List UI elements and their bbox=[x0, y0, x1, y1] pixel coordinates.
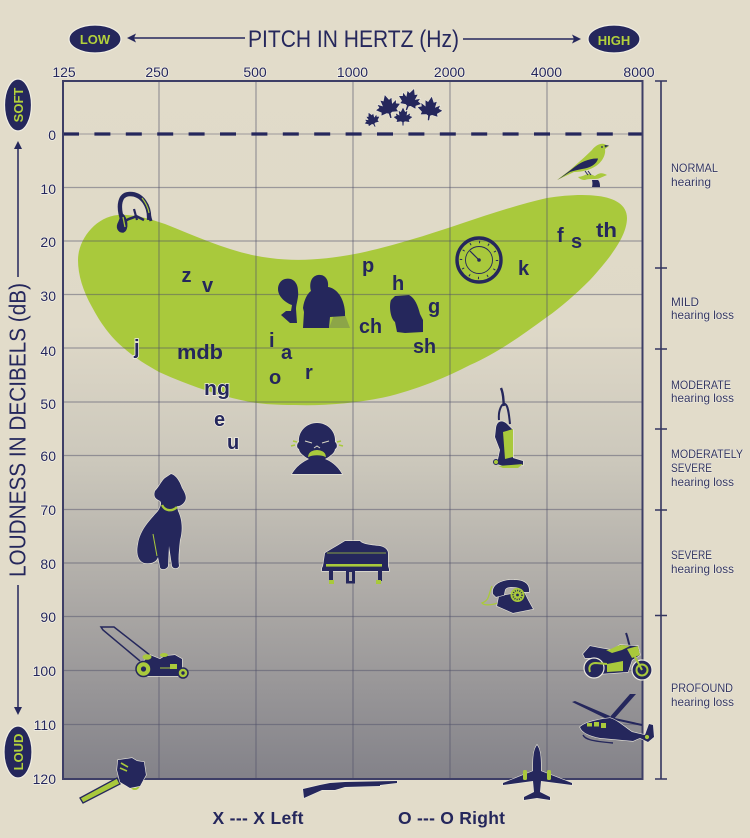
label: moderate hearing loss: hearing loss bbox=[671, 391, 734, 405]
speech sounds: u bbox=[227, 432, 239, 454]
decibel axis labels: 20 bbox=[40, 234, 56, 250]
icon: vacuum cleaner bbox=[494, 388, 523, 468]
speech sounds: o bbox=[269, 367, 281, 389]
badge: soft bbox=[4, 79, 32, 131]
speech sounds: ng bbox=[204, 378, 230, 400]
hearing level scale bbox=[655, 81, 667, 779]
icon: rifle bbox=[303, 781, 397, 798]
frequency axis labels: 4000 bbox=[531, 64, 562, 80]
decibel axis labels: 100 bbox=[33, 663, 56, 679]
decibel axis labels: 80 bbox=[40, 556, 56, 572]
frequency axis labels bbox=[52, 64, 655, 80]
speech sounds: e bbox=[214, 409, 225, 431]
label: severe hearing loss bbox=[671, 550, 734, 576]
speech sounds: k bbox=[518, 258, 530, 280]
speech sounds: r bbox=[305, 362, 313, 384]
badge: soft: SOFT bbox=[11, 88, 26, 122]
label: mild hearing loss: hearing loss bbox=[671, 308, 734, 322]
speech sounds: v bbox=[202, 275, 214, 297]
speech sounds: i bbox=[269, 330, 275, 352]
label: mild hearing loss: MILD bbox=[671, 297, 699, 309]
label: profound hearing loss: PROFOUND bbox=[671, 683, 733, 695]
label: moderate hearing loss: MODERATE bbox=[671, 380, 731, 392]
legend: right ear: O --- O Right bbox=[398, 808, 505, 828]
decibel axis labels: 40 bbox=[40, 343, 56, 359]
badge: low bbox=[69, 25, 121, 53]
label: profound hearing loss: hearing loss bbox=[671, 695, 734, 709]
title: loudness in decibels: LOUDNESS IN DECIBELS (dB) bbox=[4, 283, 30, 577]
speech sounds: p bbox=[362, 255, 374, 277]
label: normal hearing: hearing bbox=[671, 175, 711, 189]
label: normal hearing: NORMAL bbox=[671, 163, 719, 175]
legend: left ear: X --- X Left bbox=[212, 808, 304, 828]
speech sounds: j bbox=[133, 337, 140, 359]
icon: two people talking bbox=[278, 275, 350, 328]
icon: chainsaw bbox=[80, 758, 146, 803]
decibel axis labels: 120 bbox=[33, 771, 56, 787]
icon: crying baby bbox=[291, 423, 343, 474]
speech sounds: ch bbox=[359, 316, 382, 338]
label: moderately severe hearing loss bbox=[671, 449, 743, 489]
icon: clock bbox=[457, 238, 501, 282]
icon: person's head bbox=[390, 295, 423, 333]
grid lines bbox=[63, 81, 642, 779]
speech sounds: f bbox=[557, 225, 564, 247]
arrow: toward loud bbox=[14, 585, 22, 715]
arrow: toward soft bbox=[14, 141, 22, 277]
badge: low: LOW bbox=[80, 32, 111, 47]
label: mild hearing loss bbox=[671, 297, 734, 322]
frequency axis labels: 500 bbox=[243, 64, 267, 80]
speech banana bbox=[78, 195, 627, 405]
plot background bbox=[63, 81, 642, 779]
badge: loud bbox=[4, 726, 32, 778]
label: moderately severe hearing loss: hearing loss bbox=[671, 475, 734, 489]
icon: headphones bbox=[118, 194, 151, 232]
speech sounds: g bbox=[428, 296, 440, 318]
icon: airplane bbox=[503, 745, 572, 800]
icon: grand piano bbox=[322, 541, 389, 584]
label: moderate hearing loss bbox=[671, 380, 734, 405]
label: severe hearing loss: SEVERE bbox=[671, 550, 712, 562]
title: pitch in hertz: PITCH IN HERTZ (Hz) bbox=[248, 26, 459, 53]
decibel axis labels: 70 bbox=[40, 502, 56, 518]
decibel axis labels: 90 bbox=[40, 609, 56, 625]
decibel axis labels bbox=[33, 127, 56, 787]
speech sounds: th bbox=[596, 220, 617, 242]
label: moderately severe hearing loss: SEVERE bbox=[671, 463, 712, 475]
icon: motorcycle bbox=[583, 633, 652, 680]
badge: high: HIGH bbox=[598, 33, 630, 48]
arrow: toward high bbox=[463, 34, 581, 44]
frequency axis labels: 8000 bbox=[623, 64, 655, 80]
speech sounds: z bbox=[182, 265, 192, 287]
decibel axis labels: 110 bbox=[34, 717, 56, 733]
speech sounds: h bbox=[392, 273, 404, 295]
decibel axis labels: 60 bbox=[40, 448, 56, 464]
badge: loud: LOUD bbox=[11, 734, 26, 770]
decibel axis labels: 50 bbox=[40, 396, 56, 412]
decibel axis labels: 0 bbox=[48, 127, 56, 143]
speech sounds: s bbox=[571, 231, 582, 253]
plot frame bbox=[63, 81, 642, 779]
label: moderately severe hearing loss: MODERATELY bbox=[671, 449, 743, 461]
frequency axis labels: 2000 bbox=[434, 64, 465, 80]
icon: falling leaves bbox=[361, 85, 444, 130]
frequency axis labels: 125 bbox=[52, 64, 76, 80]
label: normal hearing bbox=[671, 163, 719, 189]
badge: high bbox=[588, 25, 640, 53]
frequency axis labels: 250 bbox=[145, 64, 169, 80]
frequency axis labels: 1000 bbox=[337, 64, 368, 80]
label: severe hearing loss: hearing loss bbox=[671, 562, 734, 576]
arrow: toward low bbox=[127, 34, 245, 42]
zero decibel dashed line bbox=[63, 132, 642, 136]
label: profound hearing loss bbox=[671, 683, 734, 709]
icon: songbird bbox=[557, 144, 609, 187]
decibel axis labels: 30 bbox=[40, 288, 56, 304]
icon: telephone bbox=[482, 580, 533, 613]
icon: helicopter bbox=[572, 694, 654, 743]
decibel axis labels: 10 bbox=[40, 181, 56, 197]
speech sounds: mdb bbox=[177, 342, 223, 364]
speech sounds: a bbox=[281, 342, 293, 364]
speech sounds: sh bbox=[413, 336, 436, 358]
icon: dog bbox=[137, 474, 186, 569]
speech sounds bbox=[133, 220, 617, 454]
icon: lawn mower bbox=[101, 627, 188, 678]
